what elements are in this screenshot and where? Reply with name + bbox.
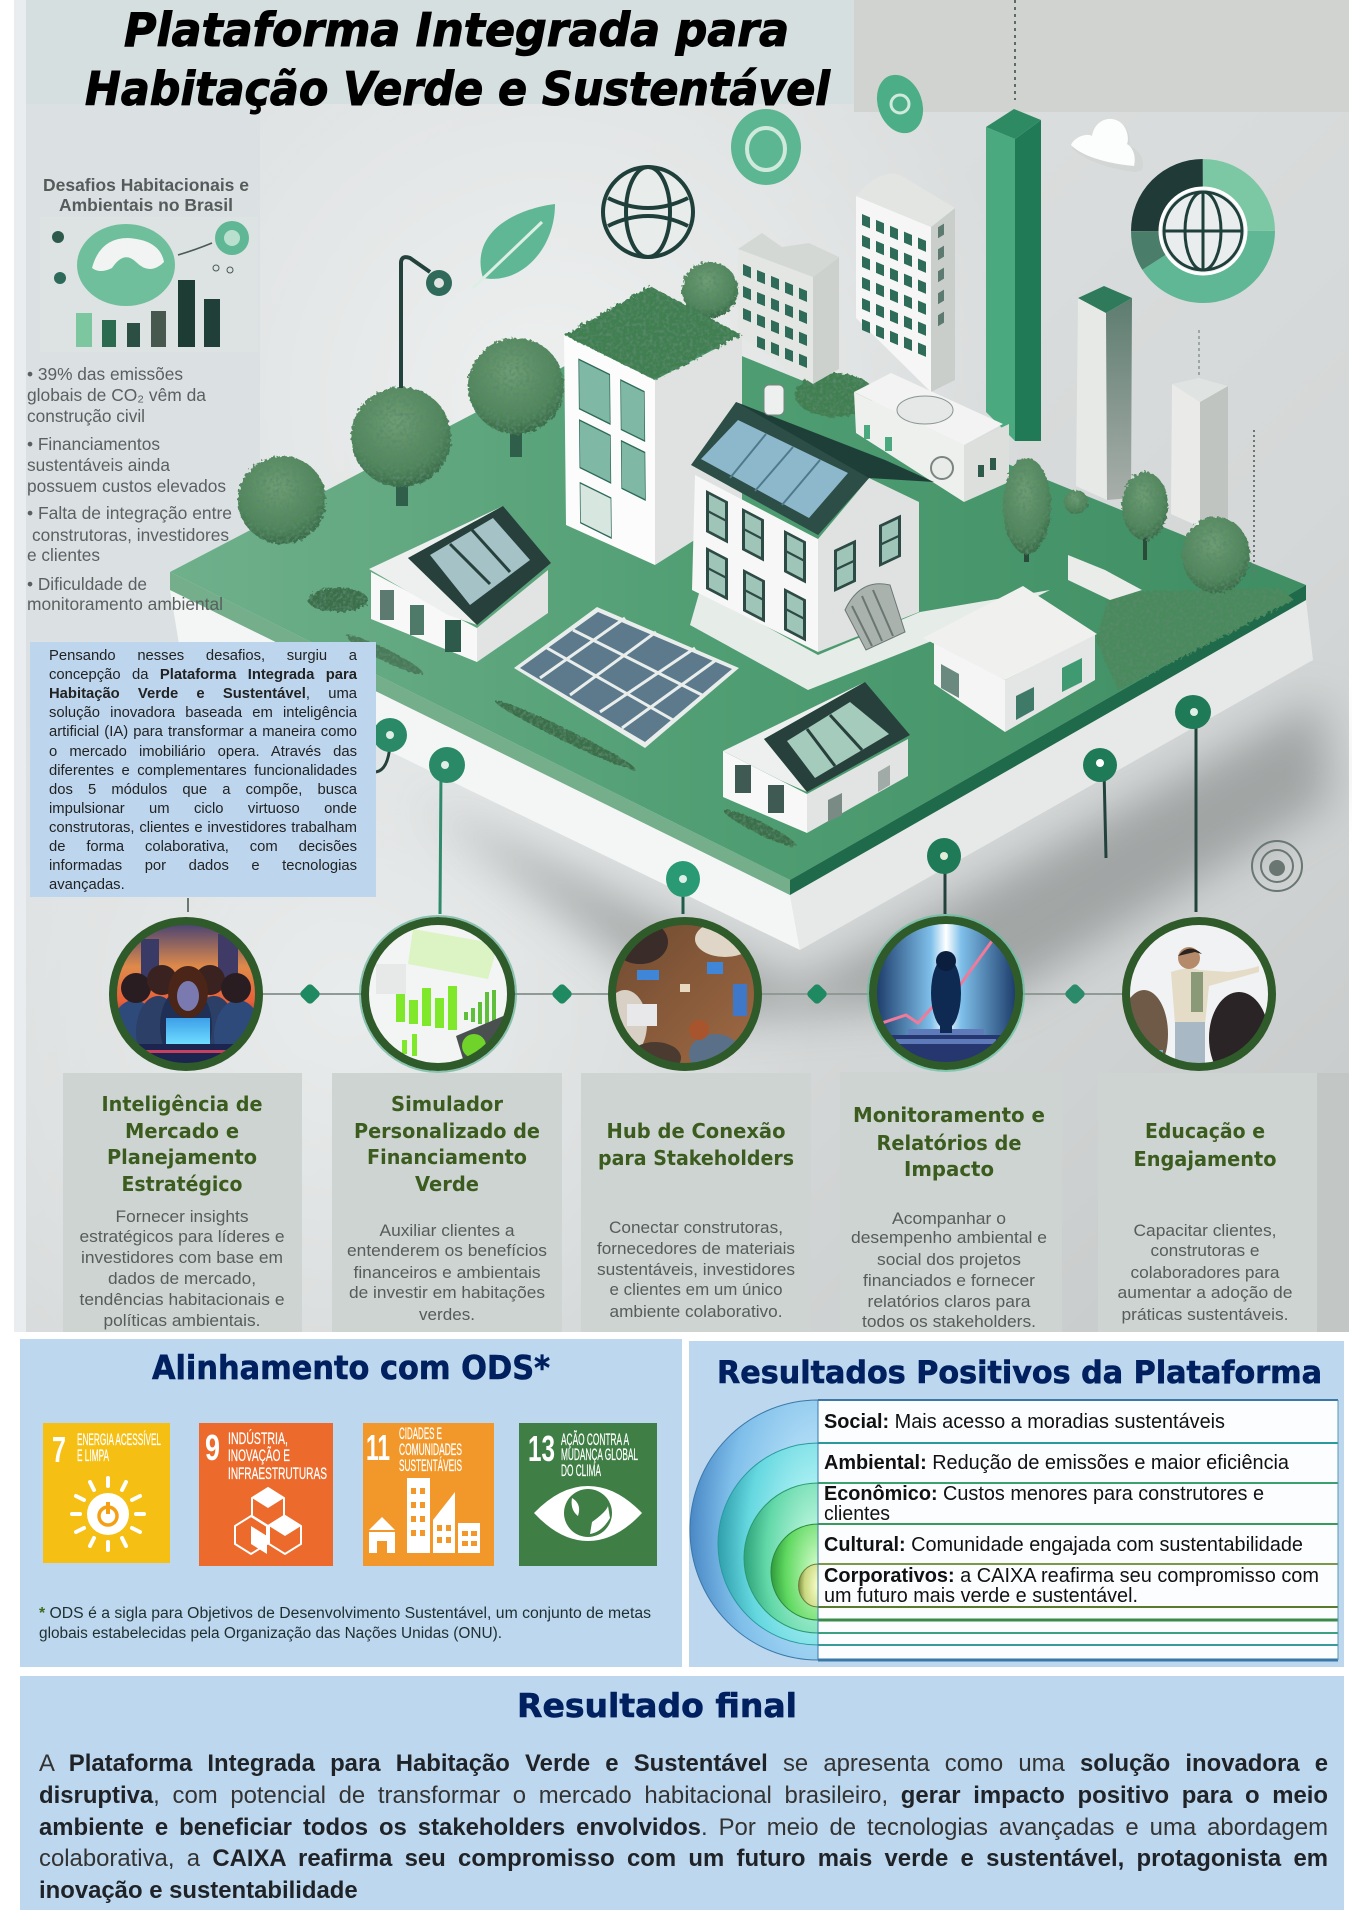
module panel 3: e clientes em um único	[610, 1280, 782, 1299]
module panel 5: Capacitar clientes,	[1134, 1221, 1276, 1240]
hero background	[14, 0, 1349, 1332]
SDG tile 9: INOVAÇÃO E	[228, 1445, 290, 1465]
title: Habitação Verde e Sustentável	[85, 62, 831, 116]
challenges list: • Falta de integração entre	[27, 503, 232, 523]
intro text box	[30, 642, 376, 897]
icon: globe	[603, 167, 693, 257]
front small house	[723, 682, 910, 833]
challenges list: construção civil	[27, 406, 145, 426]
ODS heading: Alinhamento com ODS*	[152, 1348, 550, 1387]
module panel 4: Acompanhar o	[892, 1209, 1006, 1228]
title: Plataforma Integrada para	[124, 3, 789, 57]
intro text box: solução inovadora baseada em inteligência	[49, 705, 357, 721]
nested semicircles	[690, 1400, 818, 1660]
platform	[170, 320, 1313, 950]
module panel 2: verdes.	[419, 1305, 475, 1324]
module panel 4	[840, 1072, 1062, 1332]
module panel 5: colaboradores para	[1130, 1263, 1280, 1282]
module panel 5: construtoras e	[1150, 1241, 1260, 1260]
module panel 1: estratégicos para líderes e	[80, 1227, 284, 1246]
icon: cloud	[1071, 119, 1143, 172]
SDG tile 11: CIDADES E	[399, 1425, 442, 1443]
module panel 5: aumentar a adoção de	[1118, 1283, 1292, 1302]
final paragraph: A Plataforma Integrada para Habitação Verde e Sustentável se apresenta como uma solução inovadora e	[39, 1750, 1328, 1777]
module panel 1: Planejamento	[107, 1145, 257, 1169]
right small house	[923, 586, 1097, 732]
panel: positive results	[689, 1341, 1344, 1667]
ODS footnote: * ODS é a sigla para Objetivos de Desenvolvimento Sustentável, um conjunto de metas	[39, 1605, 651, 1622]
challenges list: monitoramento ambiental	[27, 594, 223, 614]
intro text box: construtoras, clientes e investidores trabalham	[49, 820, 357, 836]
final paragraph: ambiente e beneficiar todos os stakeholders envolvidos. Por meio de tecnologias avançadas e uma abordagem	[39, 1814, 1328, 1841]
challenges list: globais de CO₂ vêm da	[27, 385, 206, 405]
intro text box: informadas por dados e tecnologias	[49, 858, 357, 874]
challenges list: • 39% das emissões	[27, 364, 183, 384]
results table	[818, 1400, 1338, 1660]
challenges heading: Ambientais no Brasil	[59, 195, 233, 215]
module panel 3	[581, 1073, 811, 1332]
panel: ODS alignment	[20, 1339, 682, 1667]
white tower	[1171, 330, 1254, 580]
module panel 2: Verde	[415, 1172, 479, 1196]
module panel 2: entenderem os benefícios	[347, 1241, 547, 1260]
icon: donut chart with globe	[1146, 174, 1260, 288]
icon: street lamp	[401, 257, 452, 388]
intro text box: artificial (IA) para transformar a maneira como	[49, 724, 357, 740]
intro text box: concepção da Plataforma Integrada para	[49, 667, 357, 683]
ODS footnote: globais estabelecidas pela Organização das Nações Unidas (ONU).	[39, 1625, 502, 1642]
SDG tile 9: 9	[205, 1427, 220, 1468]
timeline connector	[262, 983, 1122, 1005]
SDG tile 9	[199, 1423, 333, 1566]
flat utility block	[854, 373, 1009, 502]
results table: clientes	[824, 1503, 890, 1525]
tree behind tall building	[682, 262, 738, 318]
module panel 3: Conectar construtoras,	[609, 1218, 783, 1237]
module panel 5	[1098, 1073, 1317, 1332]
SDG tile 13	[519, 1423, 657, 1566]
module 4 photo	[868, 915, 1024, 1071]
challenges list: possuem custos elevados	[27, 476, 226, 496]
challenges list: sustentáveis ainda	[27, 455, 170, 475]
white path	[690, 590, 1050, 690]
module panel 1: dados de mercado,	[108, 1269, 256, 1288]
hero illustration	[14, 0, 1352, 1332]
intro text box: dos 5 módulos que a compõe, busca	[49, 782, 357, 798]
white grid building	[856, 174, 955, 392]
challenges list: e clientes	[27, 545, 100, 565]
SDG tile 11	[363, 1423, 494, 1566]
module panel 2: financeiros e ambientais	[354, 1263, 540, 1282]
module panel 1: Fornecer insights	[116, 1207, 248, 1226]
connector pins	[188, 695, 1211, 914]
icon: green badge	[731, 109, 801, 185]
module panel 4: financiados e fornecer	[863, 1271, 1035, 1290]
module panel 3: para Stakeholders	[598, 1146, 794, 1170]
module panel 3: sustentáveis, investidores	[597, 1260, 795, 1279]
SDG tile 9: INDÚSTRIA,	[228, 1429, 288, 1448]
challenges heading: Desafios Habitacionais e	[43, 175, 249, 195]
results table: Econômico: Custos menores para construtores e	[824, 1483, 1264, 1505]
module panel 3: ambiente colaborativo.	[610, 1302, 782, 1321]
module panel 4: Impacto	[904, 1157, 994, 1181]
grey building	[738, 233, 839, 384]
challenges list	[27, 364, 232, 614]
emblem	[1252, 841, 1302, 891]
results table: um futuro mais verde e sustentável.	[824, 1585, 1138, 1607]
final paragraph	[39, 1750, 1328, 1904]
module panel 1: políticas ambientais.	[104, 1311, 260, 1330]
main house	[691, 385, 934, 652]
module panel 4: relatórios claros para	[868, 1292, 1031, 1311]
module 1 photo	[110, 919, 262, 1072]
final paragraph: disruptiva, com potencial de transformar o mercado habitacional brasileiro, gerar impacto positivo para o meio	[39, 1782, 1328, 1809]
panel: final result	[20, 1676, 1344, 1910]
SDG tile 7: 7	[52, 1429, 66, 1470]
SDG tile 11: 11	[366, 1427, 390, 1468]
tall white building	[564, 286, 742, 565]
icon: small green badge	[869, 68, 931, 140]
module panel 4: social dos projetos	[877, 1250, 1021, 1269]
results heading: Resultados Positivos da Plataforma	[717, 1355, 1322, 1391]
module panel 1: tendências habitacionais e	[80, 1290, 284, 1309]
trees	[238, 338, 1250, 600]
SDG tile 13: 13	[528, 1428, 555, 1469]
final heading: Resultado final	[517, 1686, 797, 1725]
module panel 3: Hub de Conexão	[606, 1119, 786, 1143]
icon: leaf	[473, 204, 555, 288]
module panel 2: Personalizado de	[354, 1119, 540, 1143]
SDG tile 9: INFRAESTRUTURAS	[228, 1465, 327, 1483]
results table: Social: Mais acesso a moradias sustentáveis	[824, 1411, 1225, 1433]
module panel 2	[332, 1073, 562, 1332]
mini chart	[40, 217, 258, 352]
intro text box: impulsionar um ciclo virtuoso onde	[49, 800, 357, 816]
results table: Cultural: Comunidade engajada com sustentabilidade	[824, 1534, 1303, 1556]
intro text box: de forma colaborativa, com decisões	[49, 838, 357, 854]
SDG tile 7	[43, 1423, 170, 1563]
module panel 1: Inteligência de	[102, 1092, 262, 1116]
SDG tile 11: COMUNIDADES	[399, 1441, 462, 1459]
module panel 1: Estratégico	[122, 1172, 242, 1196]
module panel 4: Relatórios de	[876, 1131, 1022, 1155]
module panel 1: investidores com base em	[81, 1248, 283, 1267]
module panel 5: práticas sustentáveis.	[1122, 1305, 1288, 1324]
SDG tile 7: ENERGIA ACESSÍVEL	[77, 1430, 161, 1449]
SDG tile 13: DO CLIMA	[561, 1462, 601, 1480]
module panel 5: Engajamento	[1134, 1147, 1276, 1171]
final paragraph: colaborativa, a CAIXA reafirma seu compromisso com um futuro mais verde e sustentável, protagonista em	[39, 1845, 1328, 1872]
platform shadow	[420, 700, 1330, 1020]
module panel 3: fornecedores de materiais	[597, 1239, 795, 1258]
SDG tile 11: SUSTENTÁVEIS	[399, 1456, 462, 1475]
title	[85, 3, 831, 116]
module panel 1: Mercado e	[125, 1119, 239, 1143]
final paragraph: inovação e sustentabilidade	[39, 1877, 358, 1904]
challenges list: • Dificuldade de	[27, 574, 147, 594]
results table: Corporativos: a CAIXA reafirma seu compromisso com	[824, 1565, 1319, 1587]
left house	[369, 506, 551, 662]
green tower	[986, 0, 1041, 441]
grass patches	[308, 373, 1294, 851]
challenges heading	[43, 175, 249, 215]
module 5 photo	[1120, 919, 1274, 1084]
intro text box: Habitação Verde e Sustentável, uma	[49, 686, 357, 702]
solar field	[514, 607, 739, 748]
white tower with green top	[1076, 286, 1132, 500]
module panel 2: Financiamento	[367, 1145, 527, 1169]
module panel 5: Educação e	[1145, 1119, 1265, 1143]
module panel 2: Simulador	[391, 1092, 503, 1116]
module panel 4: todos os stakeholders.	[862, 1312, 1036, 1331]
module 2 photo	[360, 916, 516, 1072]
intro text box: Pensando nesses desafios, surgiu a	[49, 648, 357, 664]
module panel 2: Auxiliar clientes a	[380, 1221, 515, 1240]
module 3 photo	[603, 919, 760, 1074]
module panel 1	[63, 1073, 302, 1332]
module panel 4: desempenho ambiental e	[851, 1228, 1047, 1247]
intro text box: avançadas.	[49, 876, 125, 892]
results table: Ambiental: Redução de emissões e maior eficiência	[824, 1452, 1290, 1474]
challenges list: construtoras, investidores	[32, 525, 229, 545]
intro text box: o mercado imobiliário opera. Através das	[49, 744, 357, 760]
intro text box: diferentes e complementares funcionalidades	[49, 762, 357, 778]
module panel 2: de investir em habitações	[349, 1283, 545, 1302]
module panel 4: Monitoramento e	[853, 1103, 1045, 1127]
SDG tile 7: E LIMPA	[77, 1447, 109, 1465]
ODS footnote	[39, 1605, 651, 1642]
challenges list: • Financiamentos	[27, 434, 160, 454]
